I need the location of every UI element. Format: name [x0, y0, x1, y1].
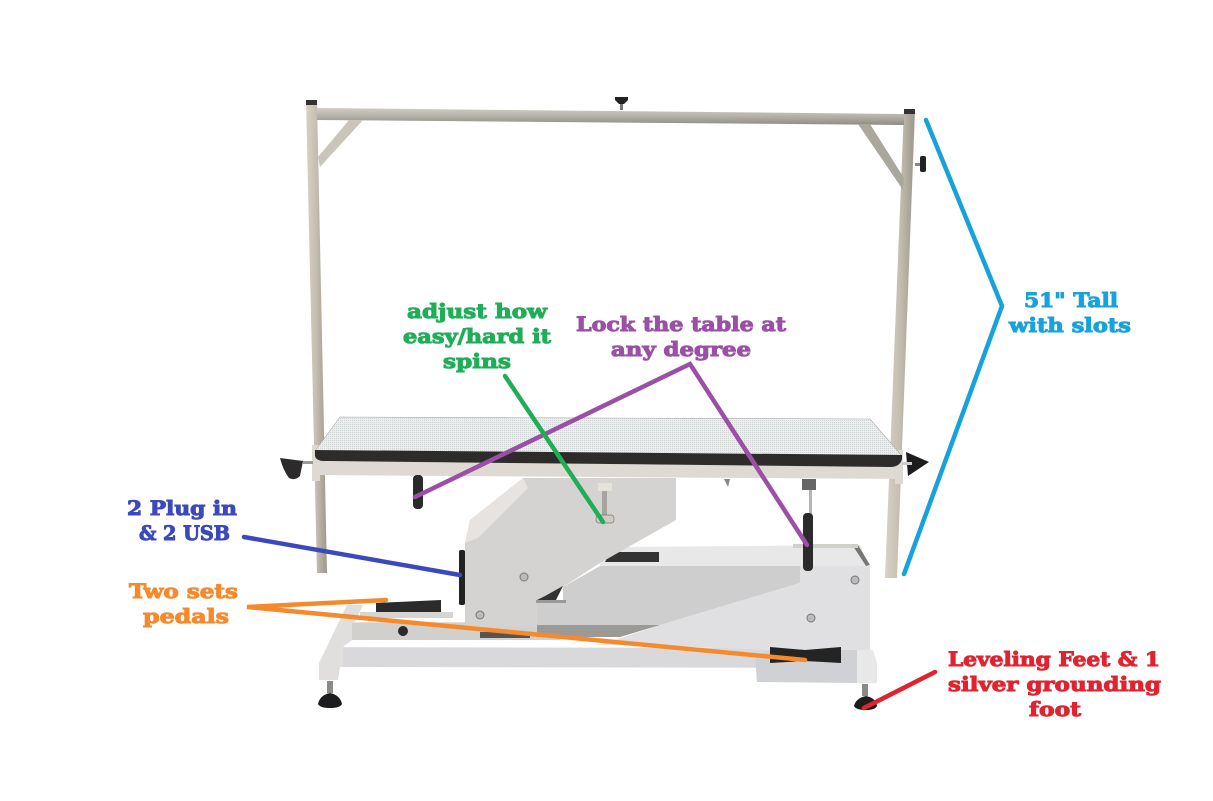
- line: leveling feet: [864, 672, 935, 708]
- label: plugs and USB: 2 Plug in: [127, 496, 237, 520]
- label: leveling feet: silver grounding: [948, 672, 1161, 696]
- table top: [312, 417, 903, 484]
- line: lock handles: [415, 364, 807, 545]
- label: pedals: [129, 579, 238, 628]
- bracket: height: [904, 120, 1002, 574]
- base frame: [319, 600, 803, 680]
- label: leveling feet: [948, 647, 1161, 721]
- label: height: [1008, 288, 1131, 337]
- label: pedals: Two sets: [129, 579, 238, 603]
- line: spin adjustment: [505, 376, 603, 522]
- label: height: 51" Tall: [1024, 288, 1118, 312]
- label: lock table: Lock the table at: [576, 312, 787, 336]
- label: pedals: pedals: [143, 604, 229, 628]
- label: plugs and USB: & 2 USB: [139, 521, 230, 545]
- label: spin adjustment: adjust how: [407, 299, 548, 323]
- line: plugs: [244, 537, 460, 575]
- label: plugs and USB: [127, 496, 237, 545]
- label: spin adjustment: spins: [443, 349, 511, 373]
- leveling feet: [318, 681, 877, 710]
- label: lock table: any degree: [611, 337, 751, 361]
- label: spin adjustment: easy/hard it: [403, 324, 552, 348]
- side knobs: [280, 452, 929, 479]
- label: leveling feet: foot: [1029, 697, 1082, 721]
- label: spin adjustment: [403, 299, 552, 373]
- lift body: [459, 478, 870, 650]
- callout lines: [244, 120, 1002, 708]
- right foot plate and pedal: [755, 647, 877, 683]
- lines: pedals: [247, 600, 805, 660]
- overhead arm frame: [306, 97, 926, 578]
- lock handles: [413, 475, 816, 571]
- label: lock table: [576, 312, 787, 361]
- label: height: with slots: [1008, 313, 1131, 337]
- label: leveling feet: Leveling Feet & 1: [948, 647, 1160, 671]
- product photo: grooming table: [280, 97, 929, 710]
